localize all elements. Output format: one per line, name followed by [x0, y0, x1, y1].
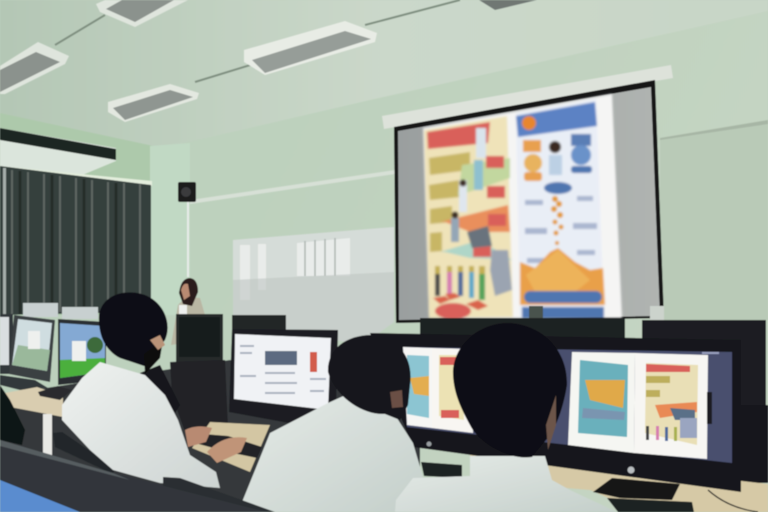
ebook pages right	[568, 352, 635, 453]
student front	[395, 323, 617, 512]
second chair front	[163, 477, 275, 512]
keyboard: centre	[195, 434, 262, 458]
table: middle	[192, 422, 270, 472]
rear computers left	[0, 303, 223, 390]
foreground right monitor	[370, 333, 741, 492]
HP logo	[628, 466, 634, 474]
chair behind left student	[53, 432, 115, 474]
right table	[470, 450, 768, 512]
hands	[185, 426, 212, 447]
foreground left monitor	[0, 440, 267, 512]
ebook pages left part	[403, 347, 432, 428]
left poster page	[424, 116, 513, 319]
table: left	[5, 387, 63, 417]
side column	[150, 143, 190, 315]
whiteboard	[233, 227, 394, 345]
ceiling lights	[0, 0, 537, 122]
student centre	[238, 335, 423, 512]
wall rail	[190, 170, 395, 204]
floor and under-desk shadow	[0, 360, 420, 512]
right poster page	[516, 99, 605, 318]
curtain	[0, 166, 151, 315]
keyboards front	[607, 498, 694, 512]
right wall lower shade	[660, 124, 768, 320]
ceiling conduit	[55, 0, 460, 82]
ceiling	[0, 0, 768, 147]
monitor stand	[593, 478, 680, 500]
projector screen	[382, 65, 673, 323]
chairs	[140, 360, 228, 432]
shirt	[62, 362, 220, 488]
mask	[144, 340, 163, 374]
projected infographic	[423, 94, 622, 319]
screen	[403, 347, 732, 463]
wall speaker	[178, 182, 196, 202]
centre monitor: social media page	[229, 329, 338, 425]
student left	[62, 292, 247, 488]
back row monitors	[232, 315, 768, 483]
left wall	[0, 113, 158, 315]
air conditioner	[0, 128, 152, 186]
presenter	[171, 278, 205, 345]
hair	[99, 292, 168, 368]
